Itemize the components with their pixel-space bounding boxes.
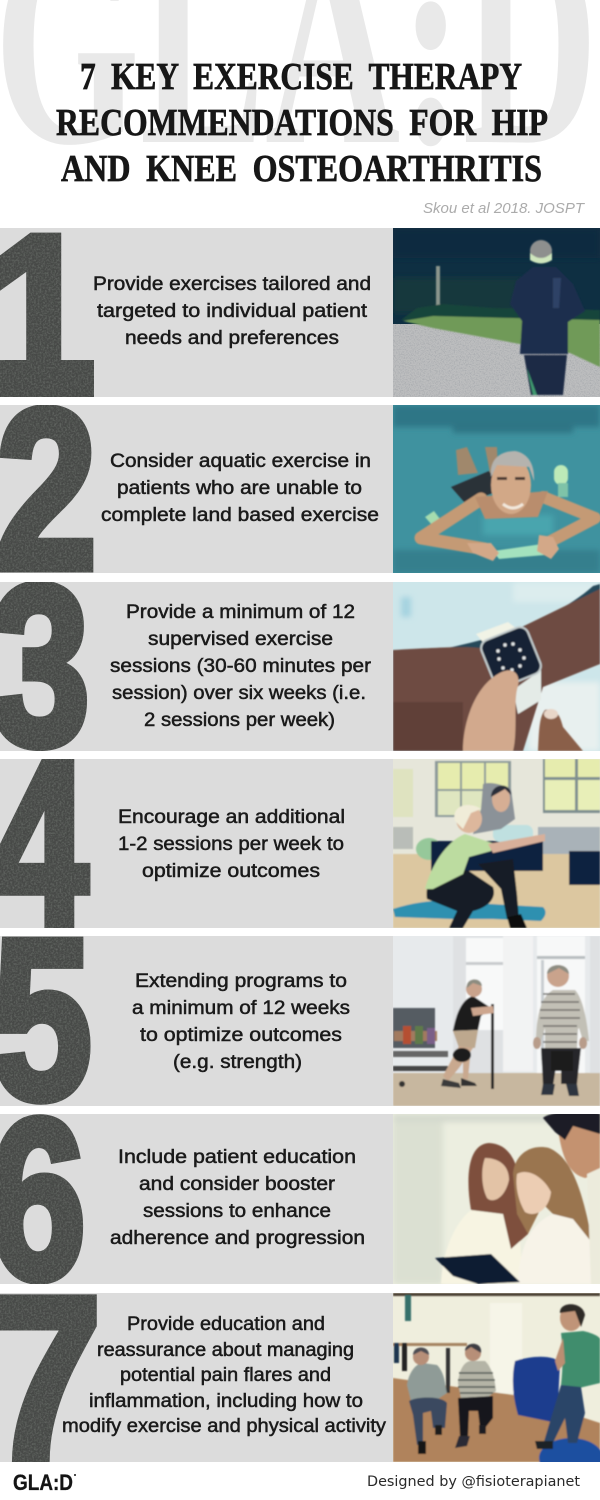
text: recommendation 7: modify exercise and physical activity xyxy=(62,1416,387,1437)
panel: recommendation 3 xyxy=(0,582,600,751)
credit: Designed by @fisioterapianet xyxy=(367,1474,581,1490)
logo: GLA:D: GLA:D xyxy=(13,1470,73,1495)
title xyxy=(56,56,548,190)
panel: recommendation 7 xyxy=(0,1293,600,1462)
panel: recommendation 5 xyxy=(0,936,600,1106)
text: recommendation 7: potential pain flares and xyxy=(120,1365,331,1386)
text: recommendation 1 xyxy=(93,274,371,349)
text: recommendation 5: Extending programs to xyxy=(135,971,347,992)
text: recommendation 3: 2 sessions per week) xyxy=(144,710,335,731)
text: recommendation 7: inflammation, including how to xyxy=(89,1391,363,1412)
text: recommendation 3: sessions (30-60 minutes per xyxy=(110,656,372,677)
text: recommendation 1: Provide exercises tailored and xyxy=(93,274,371,295)
text: recommendation 2: patients who are unable to xyxy=(117,478,362,499)
text: recommendation 5: (e.g. strength) xyxy=(173,1052,302,1073)
photo: man in pool with noodle xyxy=(393,405,600,573)
photo: two patients exercising xyxy=(393,936,600,1106)
text: recommendation 2: complete land based exercise xyxy=(101,505,379,526)
photo: squat with instructor xyxy=(393,759,600,928)
panel: recommendation 4 xyxy=(0,759,600,928)
text: recommendation 6: and consider booster xyxy=(139,1174,336,1195)
text: recommendation 5: to optimize outcomes xyxy=(140,1025,342,1046)
photo: clinicians reading a tablet xyxy=(393,1114,600,1284)
text: recommendation 4: 1-2 sessions per week to xyxy=(118,834,344,855)
text: recommendation 3: Provide a minimum of 12 xyxy=(126,602,355,623)
text: recommendation 6: sessions to enhance xyxy=(143,1201,331,1222)
text: recommendation 2: Consider aquatic exercise in xyxy=(110,451,371,472)
text: recommendation 7: reassurance about managing xyxy=(97,1340,354,1361)
text: recommendation 4: optimize outcomes xyxy=(142,861,320,882)
text: recommendation 5: a minimum of 12 weeks xyxy=(132,998,350,1019)
photo: man walking on a path xyxy=(393,228,600,397)
photo: smartwatch on wrist xyxy=(393,582,600,751)
text: recommendation 6: Include patient education xyxy=(118,1147,356,1168)
text: recommendation 3: supervised exercise xyxy=(148,629,333,650)
text: recommendation 3: session) over six weeks (i.e. xyxy=(112,683,366,704)
text: recommendation 4 xyxy=(118,807,345,882)
text: recommendation 7: Provide education and xyxy=(127,1314,325,1335)
title: 7 KEY EXERCISE THERAPY xyxy=(80,56,522,98)
text: recommendation 6 xyxy=(110,1147,365,1249)
text: recommendation 7 xyxy=(62,1314,387,1437)
text: recommendation 1: needs and preferences xyxy=(125,328,339,349)
text: recommendation 4: Encourage an additional xyxy=(118,807,345,828)
photo: group talking in gym xyxy=(393,1293,600,1462)
panel: recommendation 1 xyxy=(0,228,600,397)
panel: recommendation 2 xyxy=(0,405,600,573)
text: recommendation 6: adherence and progression xyxy=(110,1228,365,1249)
text: recommendation 3 xyxy=(110,602,372,731)
citation: Skou et al 2018. JOSPT xyxy=(423,201,585,217)
text: recommendation 5 xyxy=(132,971,350,1073)
text: recommendation 1: targeted to individual patient xyxy=(97,301,368,322)
panel: recommendation 6 xyxy=(0,1114,600,1284)
text: recommendation 2 xyxy=(101,451,379,526)
